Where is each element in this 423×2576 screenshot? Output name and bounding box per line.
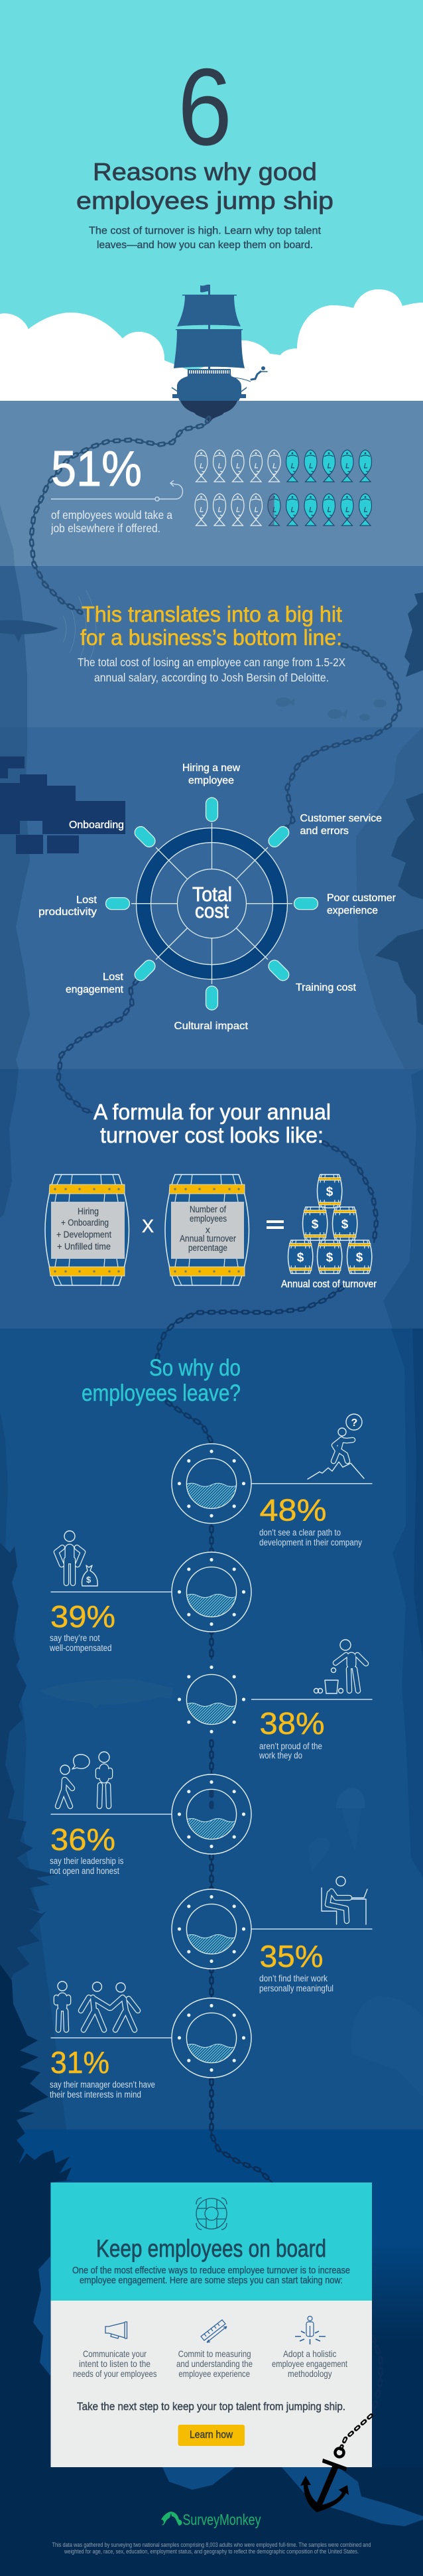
stat: 48 percent: don’t see a clear path to bbox=[259, 1528, 341, 1538]
stat: 38 percent: work they do bbox=[259, 1751, 302, 1760]
panel heading: Keep employees on board bbox=[96, 2235, 326, 2262]
wheel labels: employee bbox=[188, 775, 234, 786]
chart: ship wheel of total cost bbox=[38, 762, 396, 1032]
wheel labels: Cultural impact bbox=[174, 1021, 249, 1032]
step 1 text: Communicate your bbox=[83, 2348, 147, 2359]
black chain on panel bbox=[341, 2415, 371, 2449]
icon: man with money bag: $ bbox=[86, 1575, 91, 1585]
stat: 36 percent: say their leadership is bbox=[50, 1856, 124, 1866]
stat: 39 percent bbox=[49, 1599, 115, 1653]
porthole: 39 percent bbox=[172, 1552, 251, 1632]
subtitle: leaves—and how you can keep them on board. bbox=[97, 240, 313, 251]
formula barrel: cost per employee: + Development bbox=[56, 1230, 111, 1240]
stat: 35 percent bbox=[259, 1939, 333, 1993]
icon: life ring bbox=[196, 2198, 227, 2230]
stat: 35 percent: don’t find their work bbox=[259, 1973, 328, 1983]
fishing line hook bbox=[51, 480, 183, 501]
stat: 31 percent: 31% bbox=[50, 2045, 109, 2080]
stat: 36 percent: 36% bbox=[50, 1822, 115, 1857]
wheel labels: Lost bbox=[76, 894, 97, 906]
step 3 text: Adopt a holistic bbox=[283, 2348, 337, 2359]
wheel labels: engagement bbox=[66, 984, 124, 995]
stacked money barrels: $ bbox=[341, 1218, 349, 1232]
background: onboarding blocks bbox=[0, 756, 125, 854]
multiply sign: X bbox=[142, 1216, 154, 1236]
wheel labels: Customer service bbox=[300, 813, 382, 824]
formula barrel: employee turnover: x bbox=[206, 1225, 210, 1235]
porthole: 35 percent bbox=[172, 1889, 251, 1969]
stat: 31 percent bbox=[50, 2045, 155, 2100]
button: learn how bbox=[178, 2425, 245, 2446]
icon: anchor bbox=[300, 2449, 349, 2512]
heading: formula: A formula for your annual bbox=[93, 1100, 331, 1124]
stat: 51 percent: 51% bbox=[51, 441, 142, 496]
porthole 36 details bbox=[178, 1780, 245, 1848]
stat: 36 percent bbox=[50, 1822, 124, 1876]
step 2 text: employee experience bbox=[178, 2368, 250, 2379]
porthole: 31 percent bbox=[172, 1998, 251, 2078]
label: annual cost of turnover: Annual cost of turnover bbox=[281, 1279, 377, 1290]
step 1 text: needs of your employees bbox=[73, 2368, 156, 2379]
wheel labels: Training cost bbox=[296, 982, 357, 993]
ship bbox=[172, 285, 267, 423]
stacked money barrels bbox=[288, 1175, 372, 1273]
wheel labels: experience bbox=[327, 905, 378, 916]
formula barrel: employee turnover: Annual turnover bbox=[180, 1234, 236, 1244]
formula barrel: cost per employee: + Onboarding bbox=[61, 1218, 109, 1228]
panel intro text: One of the most effective ways to reduce employee turnover is to increase bbox=[72, 2265, 350, 2276]
formula barrel: employee turnover bbox=[165, 1175, 249, 1285]
footnote bbox=[52, 2541, 371, 2555]
porthole: 36 percent bbox=[172, 1774, 251, 1854]
background: right cliffs bbox=[356, 727, 423, 1878]
wheel labels: productivity bbox=[38, 906, 97, 918]
formula barrel: employee turnover: Number of bbox=[190, 1204, 226, 1214]
wheel centre label: Total bbox=[192, 883, 232, 906]
step 1 text: intent to listen to the bbox=[79, 2358, 151, 2369]
icon: holistic person bbox=[295, 2316, 326, 2344]
text: cost of losing an employee: The total cost of losing an employee can range from 1.5-2X bbox=[78, 656, 345, 669]
subtitle bbox=[89, 226, 322, 251]
step 2 text bbox=[176, 2348, 253, 2379]
stat: 51 percent: job elsewhere if offered. bbox=[50, 522, 160, 535]
subtitle: The cost of turnover is high. Learn why top talent bbox=[89, 226, 322, 236]
stacked money barrels: $ bbox=[312, 1218, 319, 1232]
wheel labels: Lost bbox=[103, 971, 124, 983]
logo: SurveyMonkey: SurveyMonkey bbox=[183, 2511, 261, 2528]
step 3 text bbox=[272, 2348, 347, 2379]
background: whale bbox=[40, 1679, 176, 1709]
anchor chain bbox=[31, 418, 400, 2415]
stat: 51 percent bbox=[50, 441, 183, 535]
formula barrel: cost per employee: Hiring bbox=[78, 1206, 99, 1216]
panel: keep employees on board bbox=[50, 2182, 372, 2467]
step 3 text: methodology bbox=[288, 2368, 332, 2379]
stacked money barrels: $ bbox=[297, 1251, 304, 1265]
background: left seaweed, dark bbox=[0, 1543, 56, 1991]
icon: climber with question bbox=[308, 1414, 364, 1479]
formula barrel: cost per employee: + Unfilled time bbox=[57, 1242, 111, 1252]
stat: 39 percent: say they’re not bbox=[50, 1633, 100, 1643]
icon: climber with question: ? bbox=[351, 1417, 357, 1429]
heading: why leave: So why do bbox=[149, 1355, 241, 1381]
stat: 39 percent: 39% bbox=[50, 1599, 115, 1634]
icon: megaphone bbox=[105, 2322, 127, 2338]
wheel rim bbox=[137, 828, 288, 979]
stat: 35 percent: 35% bbox=[260, 1939, 324, 1973]
background: deep blue patches bbox=[33, 2256, 423, 2526]
icon: jumping employee bbox=[251, 366, 267, 380]
step 1 text bbox=[73, 2348, 156, 2379]
icon: man with money bag bbox=[56, 1531, 97, 1586]
stat: 38 percent: 38% bbox=[260, 1706, 325, 1741]
stat: 31 percent: their best interests in mind bbox=[50, 2090, 141, 2100]
button: learn how: Learn how bbox=[190, 2429, 233, 2441]
connector lines bbox=[50, 1484, 373, 2038]
equals sign bbox=[267, 1220, 284, 1229]
wheel labels: Poor customer bbox=[327, 893, 396, 904]
sky background bbox=[0, 0, 423, 405]
heading: why leave: employees leave? bbox=[82, 1380, 241, 1406]
step 3 text: employee engagement bbox=[272, 2358, 347, 2369]
stat: 31 percent: say their manager doesn’t have bbox=[50, 2080, 155, 2090]
porthole: 38 percent bbox=[178, 1660, 245, 1739]
wheel centre label bbox=[192, 883, 232, 922]
stat: 48 percent bbox=[259, 1493, 362, 1547]
panel intro text bbox=[72, 2265, 350, 2286]
stacked money barrels: $ bbox=[326, 1185, 333, 1199]
heading: formula: turnover cost looks like: bbox=[100, 1123, 324, 1147]
logo: SurveyMonkey bbox=[161, 2511, 261, 2528]
background: jellyfish bbox=[308, 1788, 423, 2097]
stat: 51 percent: of employees would take a bbox=[51, 508, 172, 522]
title: Reasons why good bbox=[93, 158, 317, 186]
icon: employee speaking to leader bbox=[58, 1752, 110, 1806]
title number: 6 bbox=[178, 46, 232, 168]
step 2 text: and understanding the bbox=[176, 2358, 253, 2369]
formula barrel: employee turnover: percentage bbox=[188, 1243, 227, 1253]
fish pictogram bbox=[195, 450, 371, 526]
background: small fish bbox=[276, 697, 387, 721]
icon: ruler bbox=[201, 2320, 227, 2342]
stacked money barrels: $ bbox=[356, 1251, 363, 1265]
background: left cliff bbox=[0, 504, 66, 2129]
formula barrel: cost per employee bbox=[45, 1175, 129, 1285]
porthole: 48 percent bbox=[172, 1444, 251, 1524]
stacked money barrels: $ bbox=[326, 1251, 333, 1265]
heading: bottom line bbox=[80, 602, 342, 650]
heading: bottom line: This translates into a big hit bbox=[82, 602, 342, 626]
wheel labels: Hiring a new bbox=[182, 762, 240, 774]
heading: bottom line: for a business’s bottom line: bbox=[80, 625, 342, 650]
stat: 36 percent: not open and honest bbox=[50, 1866, 119, 1876]
panel intro text: employee engagement. Here are some steps you can start taking now: bbox=[80, 2275, 343, 2286]
title: employees jump ship bbox=[76, 187, 333, 214]
stat: 48 percent: 48% bbox=[260, 1493, 326, 1528]
background: shark and sonar bbox=[0, 591, 96, 668]
background: right seaweed bbox=[375, 593, 423, 1025]
background: deep left plant bbox=[0, 1964, 423, 2576]
stat: 35 percent: personally meaningful bbox=[259, 1983, 333, 1993]
icon: ship hull under water bbox=[180, 401, 237, 423]
call to action text: Take the next step to keep your top talent from jumping ship. bbox=[77, 2400, 345, 2413]
wheel centre label: cost bbox=[195, 899, 229, 922]
heading: formula bbox=[93, 1100, 331, 1147]
step 2 text: Commit to measuring bbox=[178, 2348, 251, 2359]
stat: 38 percent bbox=[259, 1706, 325, 1760]
icon: person at laptop bbox=[322, 1877, 367, 1924]
chain seen through porthole bbox=[210, 1792, 213, 1813]
wheel handles bbox=[106, 798, 318, 1010]
formula barrel: employee turnover: employees bbox=[190, 1214, 227, 1224]
text: cost of losing an employee: annual salary, according to Josh Bersin of Deloitte. bbox=[94, 671, 329, 684]
stat: 39 percent: well-compensated bbox=[49, 1643, 111, 1653]
icon: manager excluding employee bbox=[56, 1981, 138, 2030]
text: cost of losing an employee bbox=[78, 656, 345, 684]
icon: person throwing out work bbox=[314, 1640, 366, 1693]
heading: why leave bbox=[82, 1355, 241, 1406]
stat: 48 percent: development in their company bbox=[259, 1538, 362, 1547]
stat: 38 percent: aren’t proud of the bbox=[259, 1741, 322, 1751]
wheel labels bbox=[38, 762, 396, 1032]
wheel labels: Onboarding bbox=[69, 820, 124, 831]
title bbox=[76, 158, 333, 214]
wheel labels: and errors bbox=[300, 825, 349, 837]
clouds bbox=[0, 289, 423, 405]
